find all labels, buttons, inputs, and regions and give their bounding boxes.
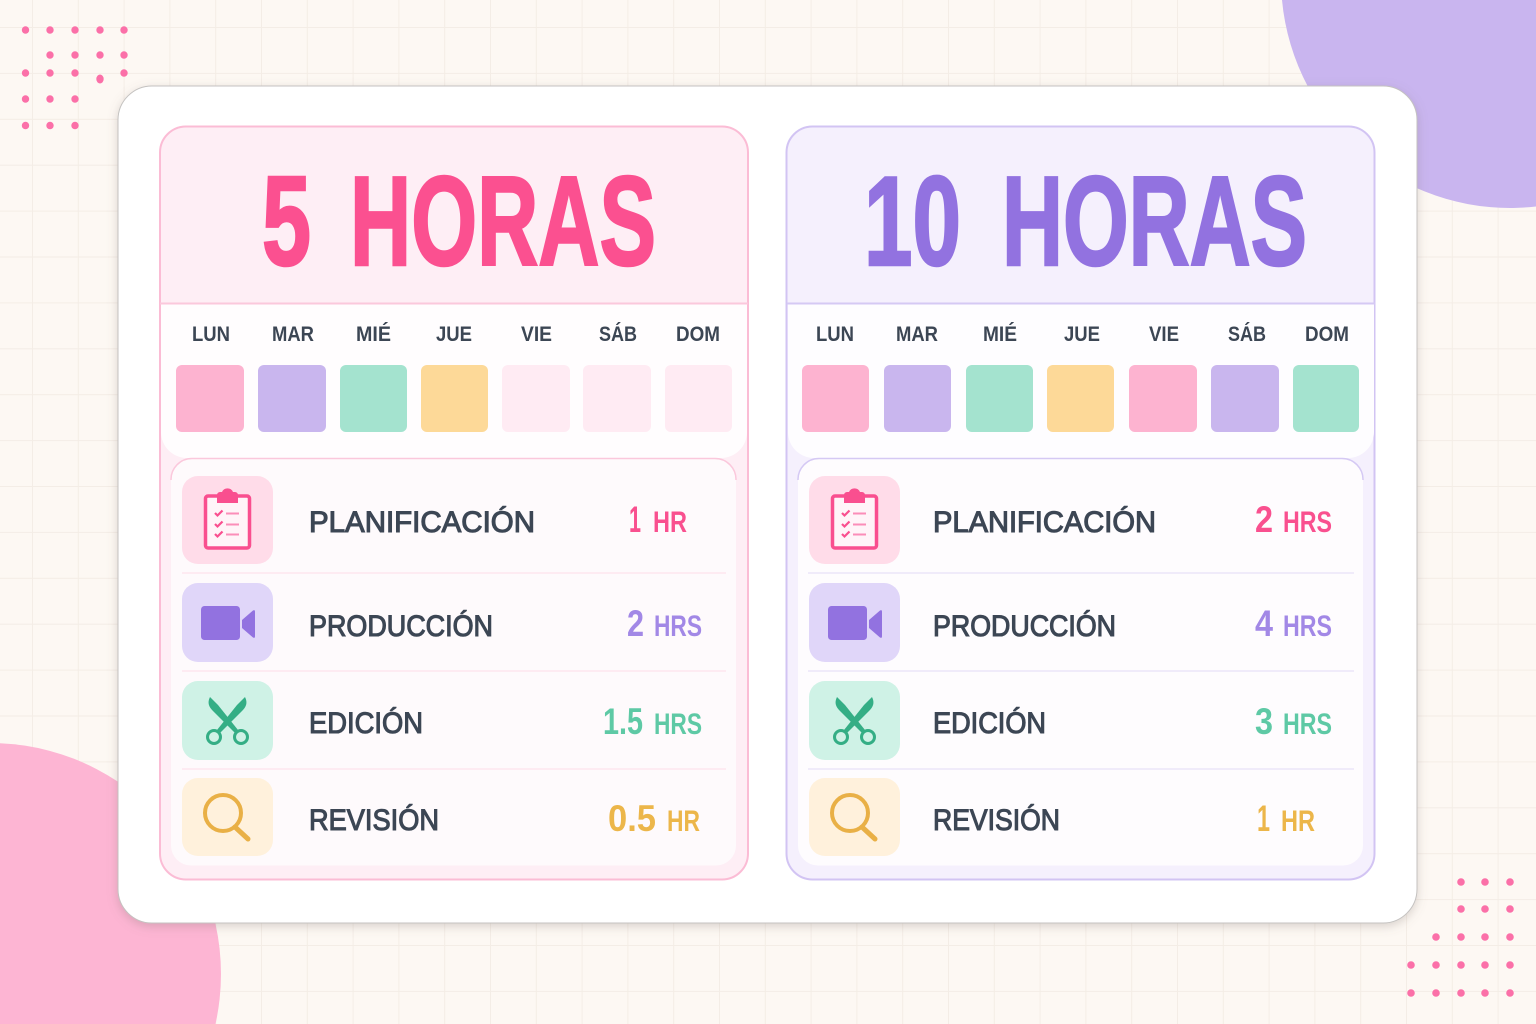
task list — [171, 458, 736, 866]
row: producción: 2 — [627, 603, 644, 644]
heading: 10 horas: 10 — [864, 150, 961, 292]
panel: 5 horas — [160, 126, 748, 880]
icon: clipboard — [832, 488, 876, 548]
main white card — [118, 86, 1417, 923]
weekly calendar: DOM — [676, 323, 720, 346]
days background — [161, 304, 747, 458]
decorative purple circle — [1282, 0, 1536, 208]
row: producción: 4 — [1255, 603, 1273, 644]
row: revisión: REVISIÓN — [933, 804, 1060, 837]
row: planificación: 1 — [629, 499, 641, 540]
weekly calendar: LUN — [192, 323, 230, 346]
decorative pink circle — [0, 743, 221, 1024]
row: producción — [182, 583, 702, 662]
row: edición: EDICIÓN — [309, 707, 423, 740]
row: edición — [182, 681, 702, 760]
row: planificación: HR — [653, 506, 687, 539]
row: edición: 3 — [1255, 701, 1273, 742]
days background — [788, 304, 1374, 458]
weekly calendar: MAR — [896, 323, 938, 346]
row: producción: HRS — [1283, 610, 1332, 643]
icon: clipboard — [206, 488, 250, 548]
row: producción: PRODUCCIÓN — [933, 610, 1116, 643]
row: edición: 1.5 — [603, 701, 643, 742]
icon: video camera — [828, 606, 882, 640]
row: revisión — [809, 778, 1315, 856]
row: planificación — [182, 476, 687, 564]
row: revisión: REVISIÓN — [309, 804, 439, 837]
row: planificación: PLANIFICACIÓN — [933, 506, 1156, 539]
weekly calendar: SÁB — [599, 323, 637, 346]
row: producción: HRS — [654, 610, 702, 643]
row: revisión — [182, 778, 700, 856]
row: edición — [809, 681, 1332, 760]
heading: 5 horas: HORAS — [350, 150, 656, 292]
weekly calendar: VIE — [1149, 323, 1179, 346]
row: planificación: 2 — [1255, 499, 1273, 540]
heading: 5 horas: 5 — [262, 150, 311, 292]
row: revisión: 1 — [1257, 798, 1270, 839]
heading: 5 horas — [262, 150, 656, 292]
row: planificación — [809, 476, 1332, 564]
weekly calendar: VIE — [521, 323, 552, 346]
heading: 10 horas — [864, 150, 1307, 292]
row: edición: HRS — [654, 708, 702, 741]
heading: 10 horas: HORAS — [1002, 150, 1307, 292]
weekly calendar: MIÉ — [356, 323, 391, 346]
weekly calendar: SÁB — [1228, 323, 1266, 346]
row: planificación: HRS — [1283, 506, 1332, 539]
dots top left — [22, 26, 128, 129]
weekly calendar: JUE — [1064, 323, 1100, 346]
row: revisión: HR — [667, 805, 700, 838]
weekly calendar: LUN — [816, 323, 854, 346]
row: edición: EDICIÓN — [933, 707, 1046, 740]
row: edición: HRS — [1283, 708, 1332, 741]
icon: magnifier — [205, 795, 248, 839]
task list — [798, 458, 1363, 866]
row: revisión: 0.5 — [608, 798, 656, 839]
icon: magnifier — [832, 795, 875, 839]
icon: scissors — [208, 697, 248, 744]
row: revisión: HR — [1281, 805, 1315, 838]
row: planificación: PLANIFICACIÓN — [309, 506, 535, 539]
weekly calendar: MIÉ — [983, 323, 1017, 346]
weekly calendar: MAR — [272, 323, 314, 346]
row: producción: PRODUCCIÓN — [309, 610, 493, 643]
icon: video camera — [201, 606, 255, 640]
weekly calendar: DOM — [1305, 323, 1349, 346]
weekly calendar: JUE — [436, 323, 472, 346]
panel: 10 horas — [786, 126, 1375, 880]
dots bottom right — [1407, 878, 1514, 997]
icon: scissors — [834, 697, 874, 744]
weekly calendar — [176, 323, 732, 432]
weekly calendar — [802, 323, 1359, 432]
row: producción — [809, 583, 1332, 662]
